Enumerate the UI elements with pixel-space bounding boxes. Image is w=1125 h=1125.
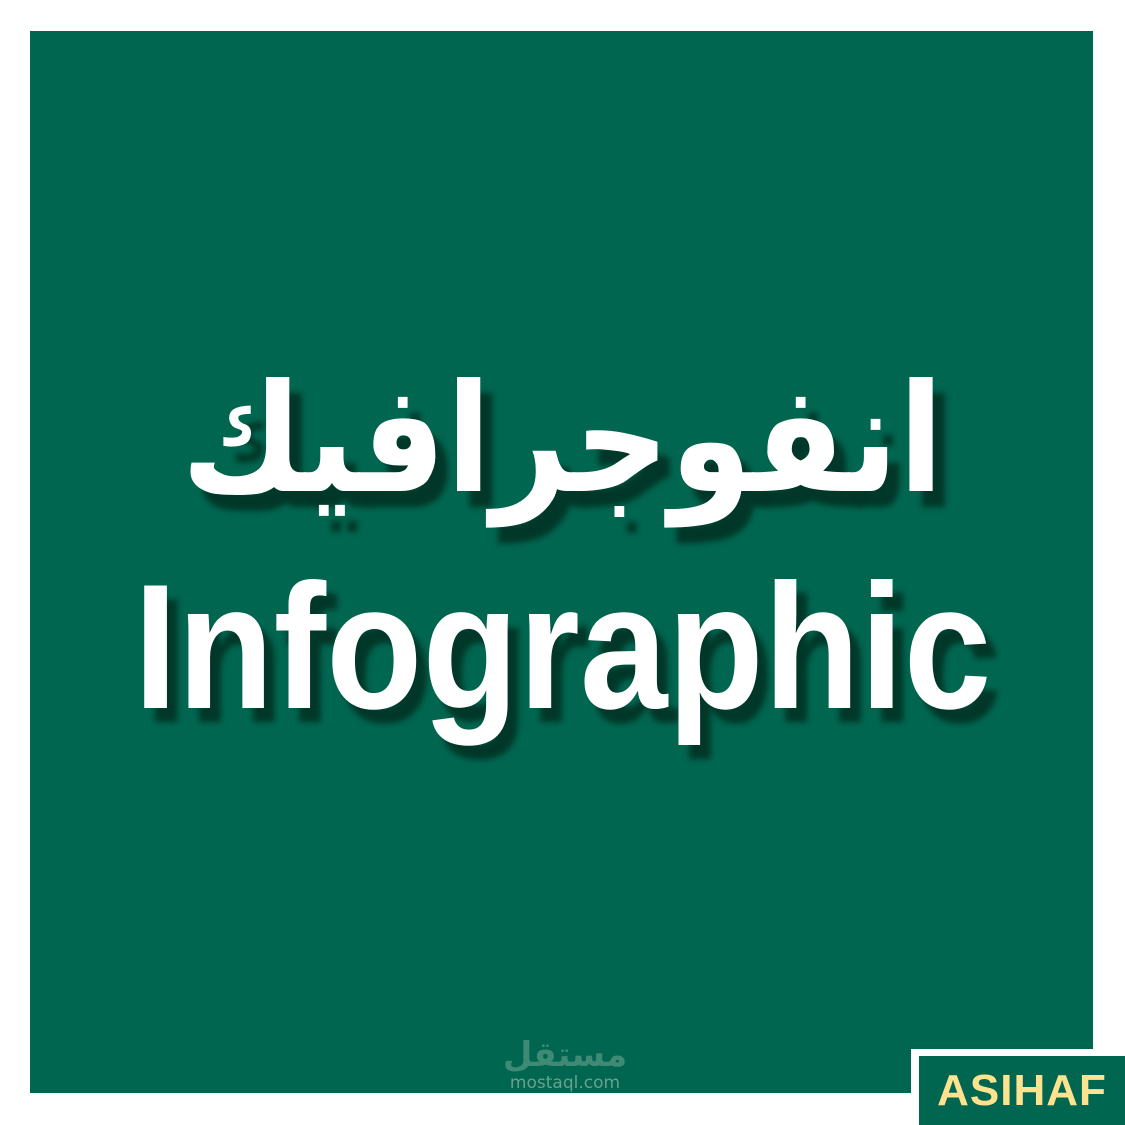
watermark: mostaql.com xyxy=(510,1073,620,1093)
watermark xyxy=(503,1035,627,1093)
watermark: مستقل xyxy=(503,1035,627,1075)
logo: ASIHAF: ASIHAF xyxy=(937,1066,1107,1115)
arabic title: انفوجرافيك xyxy=(181,353,944,527)
english title: Infographic xyxy=(134,547,991,746)
logo: ASIHAF xyxy=(911,1049,1125,1125)
